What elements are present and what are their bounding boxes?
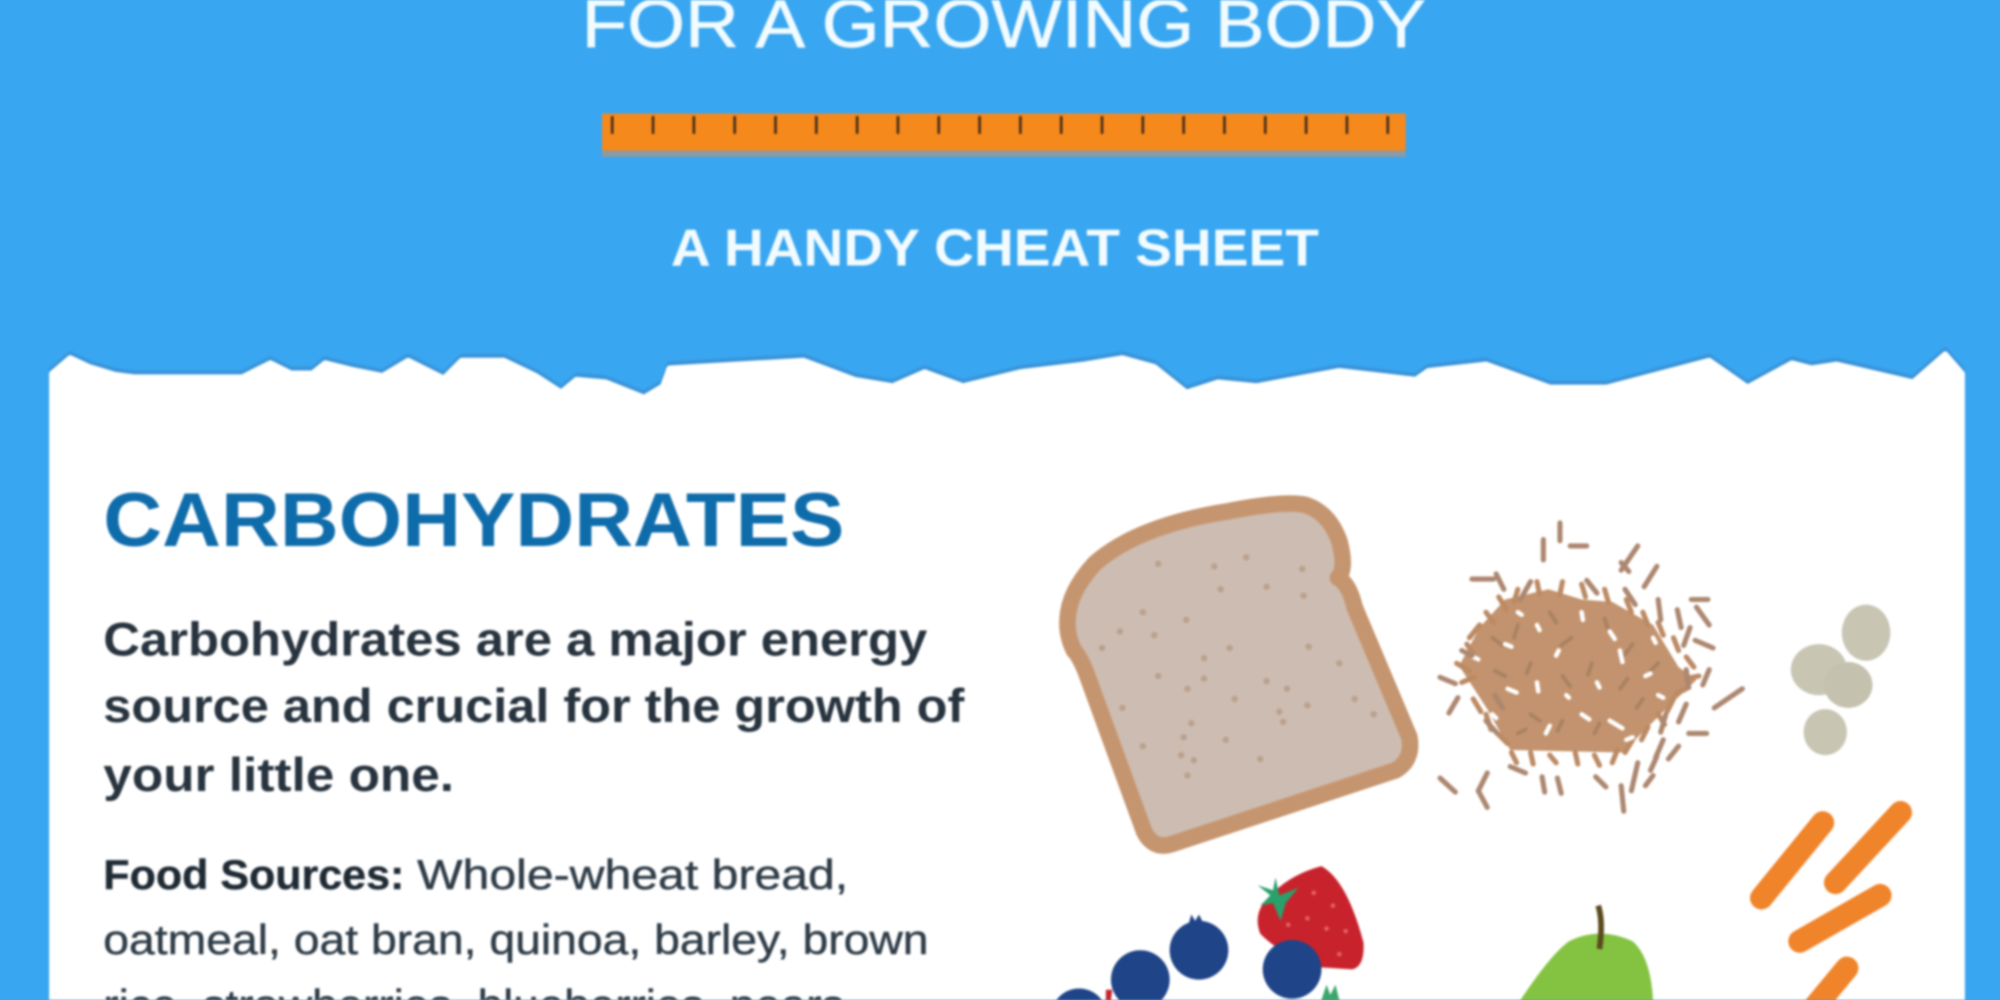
icon: pile of brown rice <box>1440 523 1742 811</box>
subtitle: A HANDY CHEAT SHEET <box>671 219 1319 277</box>
text block: carbohydrates intro: Carbohydrates are a major energy <box>103 614 927 667</box>
text block: food sources <box>103 851 929 1000</box>
icon: oats or seeds <box>1791 605 1890 755</box>
text block: carbohydrates intro: source and crucial for the growth of <box>103 680 965 733</box>
icon: strawberry <box>1258 866 1364 969</box>
panel: carbohydrates card with torn top edge <box>52 351 1962 1000</box>
text block: carbohydrates intro <box>103 614 965 802</box>
icon: leaf fragment <box>1321 985 1339 1000</box>
heading: carbohydrates: CARBOHYDRATES <box>103 478 844 563</box>
icon: slice of whole-wheat bread <box>1067 504 1410 846</box>
icon: pear <box>1520 906 1653 1000</box>
icon: carrot sticks <box>1761 812 1901 1000</box>
ruler divider <box>602 114 1406 157</box>
text block: food sources: Whole-wheat bread, <box>417 851 848 898</box>
text block: food sources: Food Sources: <box>103 851 404 898</box>
icon: blueberries <box>1051 915 1321 1000</box>
text block: carbohydrates intro: your little one. <box>103 749 454 802</box>
text block: food sources: oatmeal, oat bran, quinoa, barley, brown <box>103 916 929 963</box>
